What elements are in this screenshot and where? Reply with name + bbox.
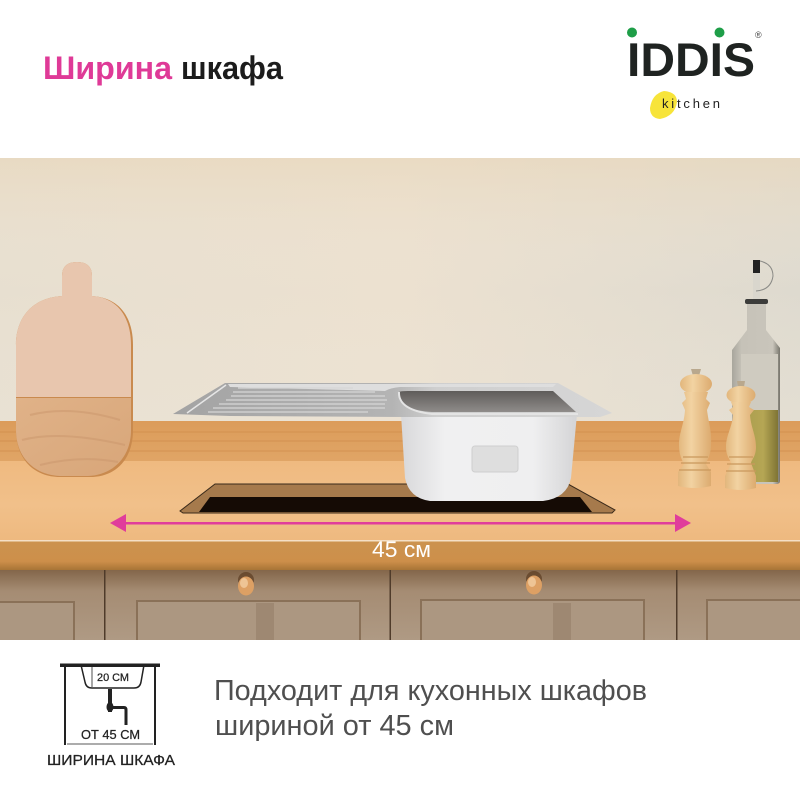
countertop front edge — [0, 540, 800, 570]
description text: шириной от 45 см — [215, 710, 454, 742]
title: шкафа — [181, 50, 283, 86]
diagram: sink cross-section — [47, 664, 175, 769]
countertop cut-out — [180, 484, 615, 513]
logo: IDDIS kitchen: IDDIS — [627, 33, 755, 86]
logo: IDDIS kitchen: ® — [755, 30, 762, 40]
logo: IDDIS kitchen — [627, 28, 762, 119]
diagram caption: ШИРИНА ШКАФА — [47, 753, 175, 769]
diagram width label: ОТ 45 СМ — [81, 727, 140, 742]
oil bottle — [732, 260, 780, 484]
overflow plate — [472, 446, 518, 472]
drainer grooves — [187, 385, 387, 413]
countertop — [0, 461, 800, 541]
tall pepper mill — [678, 369, 712, 488]
description text: Подходит для кухонных шкафов — [214, 675, 647, 707]
logo: IDDIS kitchen: kitchen — [662, 96, 720, 111]
title — [43, 50, 283, 86]
width label: 45 см — [372, 537, 431, 562]
wood backsplash — [0, 421, 800, 462]
cabinet knobs — [238, 571, 542, 596]
short pepper mill — [725, 381, 756, 490]
sink bowl body — [401, 414, 577, 501]
cutting board — [16, 262, 133, 477]
sink basin — [399, 391, 576, 412]
description text — [214, 675, 647, 742]
title: Ширина — [43, 50, 172, 86]
scene: kitchen photo — [0, 158, 800, 652]
wall — [0, 158, 800, 421]
width arrow — [110, 514, 691, 532]
sink — [173, 383, 612, 501]
sink deck — [173, 383, 612, 417]
cabinet doors — [0, 570, 800, 640]
diagram depth label: 20 СМ — [97, 672, 129, 684]
